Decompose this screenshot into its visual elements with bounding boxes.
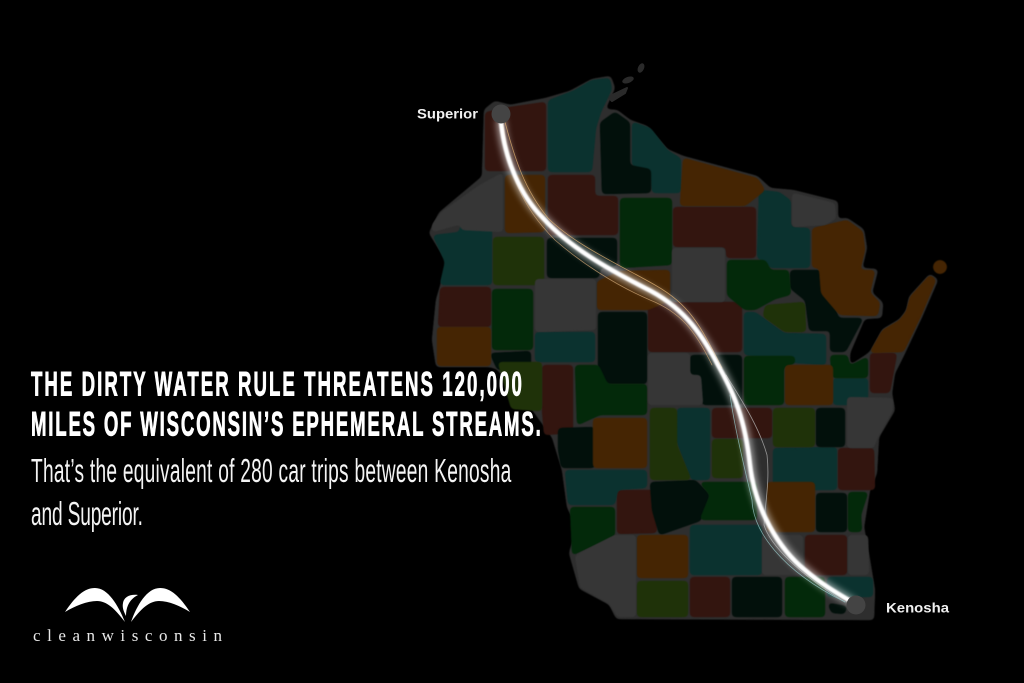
marker: Superior [492,104,510,124]
logo wings [65,588,190,622]
label: Kenosha: Kenosha [886,600,949,616]
subheading: and Superior. [31,496,143,532]
counties: teal [434,79,872,596]
headline [31,364,541,443]
label: Superior: Superior [417,106,479,122]
subheading [31,453,511,532]
marker: Kenosha [846,596,866,614]
headline: THE DIRTY WATER RULE THREATENS 120,000 [31,364,522,403]
state silhouette [430,77,937,619]
route glow [501,122,852,602]
counties: orange [438,159,946,577]
counties: green [493,199,867,616]
counties: grey [433,174,892,616]
headline: MILES OF WISCONSIN’S EPHEMERAL STREAMS. [31,404,541,443]
counties: brown [439,103,896,616]
islands [608,62,646,101]
counties: near-black green [491,113,862,616]
counties: olive [494,238,814,616]
thin route strands [503,122,845,602]
logo: Clean Wisconsin [33,588,222,645]
logo wordmark: cleanwisconsin [33,626,222,645]
route line: Superior to Kenosha [501,122,852,602]
map: Wisconsin counties [430,62,946,619]
subheading: That’s the equivalent of 280 car trips between Kenosha [31,453,511,489]
route core [501,122,852,602]
